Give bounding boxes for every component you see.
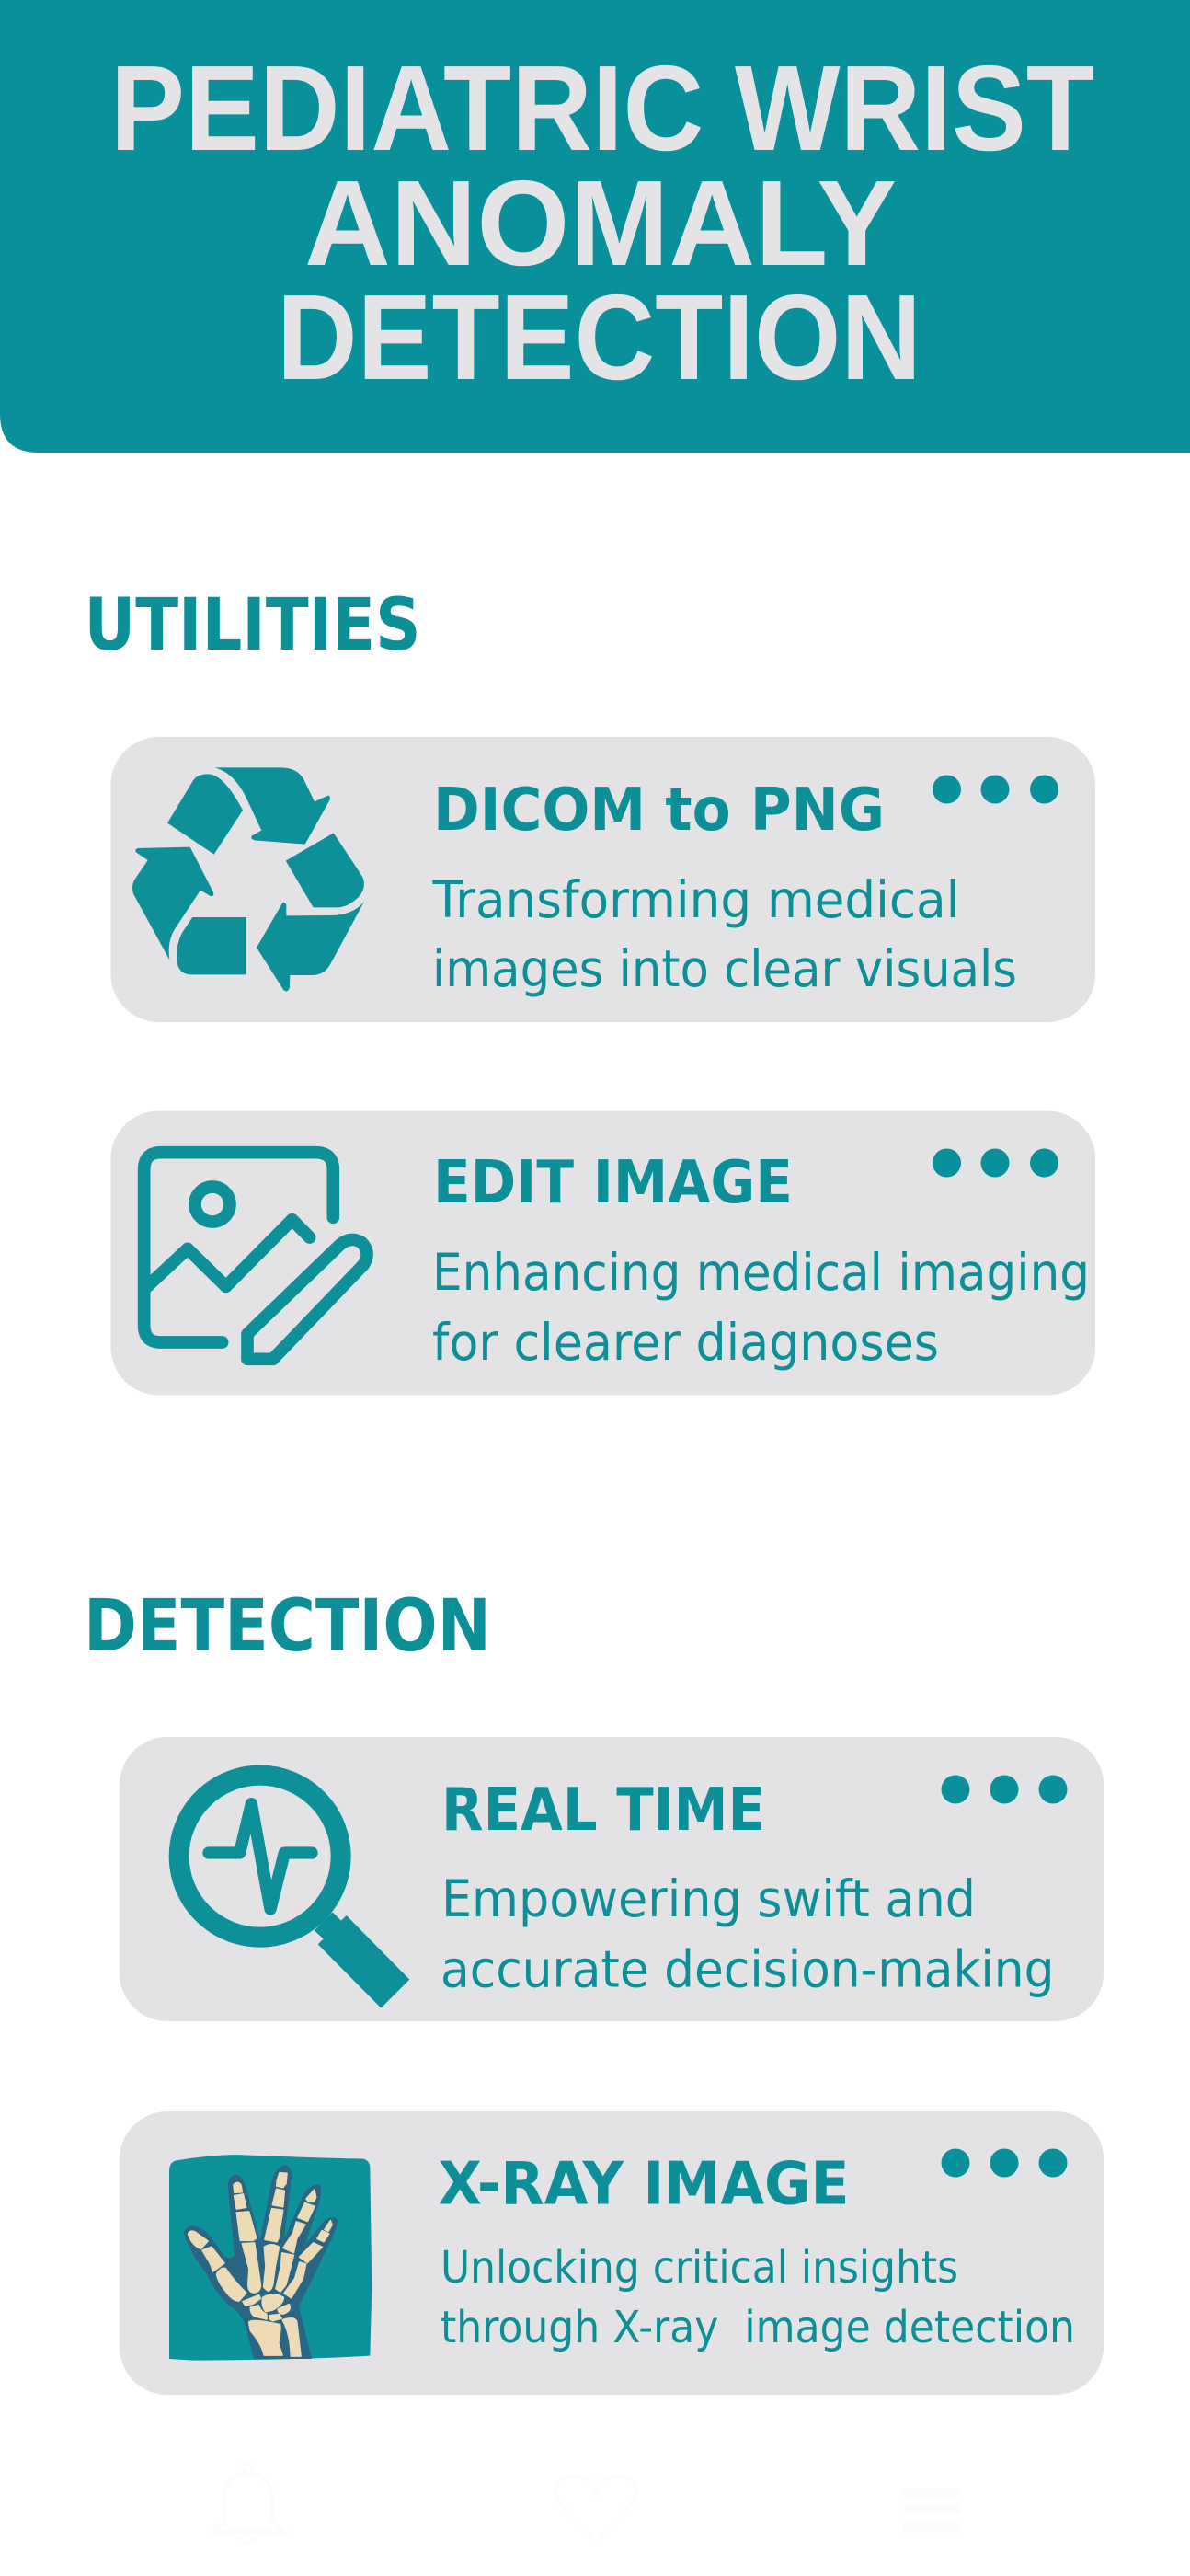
panel: edit image: [110, 1111, 1095, 1395]
panel: DICOM to PNG: [110, 737, 1095, 1022]
panel: x-ray image: [120, 2111, 1104, 2395]
card description: Unlocking critical insights: [441, 2242, 958, 2294]
card title: EDIT IMAGE: [433, 1149, 793, 1217]
title: ANOMALY: [304, 155, 897, 291]
card title: X-RAY IMAGE: [438, 2151, 850, 2219]
icon: recycle: [132, 767, 364, 991]
header banner: [0, 0, 1190, 453]
heading: utilities: UTILITIES: [85, 584, 421, 667]
icon: faint bell: [212, 2463, 285, 2543]
icon: faint heart: [555, 2476, 636, 2543]
card title: REAL TIME: [441, 1777, 765, 1845]
panel: real time: [120, 1737, 1104, 2021]
menu dots: [942, 2149, 1067, 2177]
title: PEDIATRIC WRIST: [110, 40, 1094, 176]
card description: accurate decision-making: [441, 1939, 1054, 1998]
card title: DICOM to PNG: [433, 776, 885, 845]
card description: [432, 1243, 1090, 1372]
card description: Enhancing medical imaging: [432, 1243, 1090, 1302]
card description: [441, 1869, 1054, 1998]
card description: Transforming medical: [432, 870, 959, 929]
icon: image with pencil: [144, 1153, 367, 1359]
card description: Empowering swift and: [441, 1869, 976, 1928]
menu dots: [933, 775, 1058, 804]
menu dots: [942, 1776, 1067, 1803]
card description: through X-ray image detection: [441, 2302, 1075, 2353]
icon: x-ray hand: [169, 2155, 372, 2361]
card description: [441, 2242, 1075, 2353]
title: DETECTION: [277, 270, 921, 405]
icon: magnifier with pulse: [179, 1776, 409, 2008]
menu dots: [933, 1148, 1058, 1178]
title: [110, 40, 1094, 405]
card description: [432, 870, 1017, 998]
card description: for clearer diagnoses: [432, 1313, 939, 1372]
heading: detection: DETECTION: [84, 1585, 491, 1668]
card description: images into clear visuals: [432, 939, 1017, 998]
icon: faint menu: [903, 2488, 961, 2533]
